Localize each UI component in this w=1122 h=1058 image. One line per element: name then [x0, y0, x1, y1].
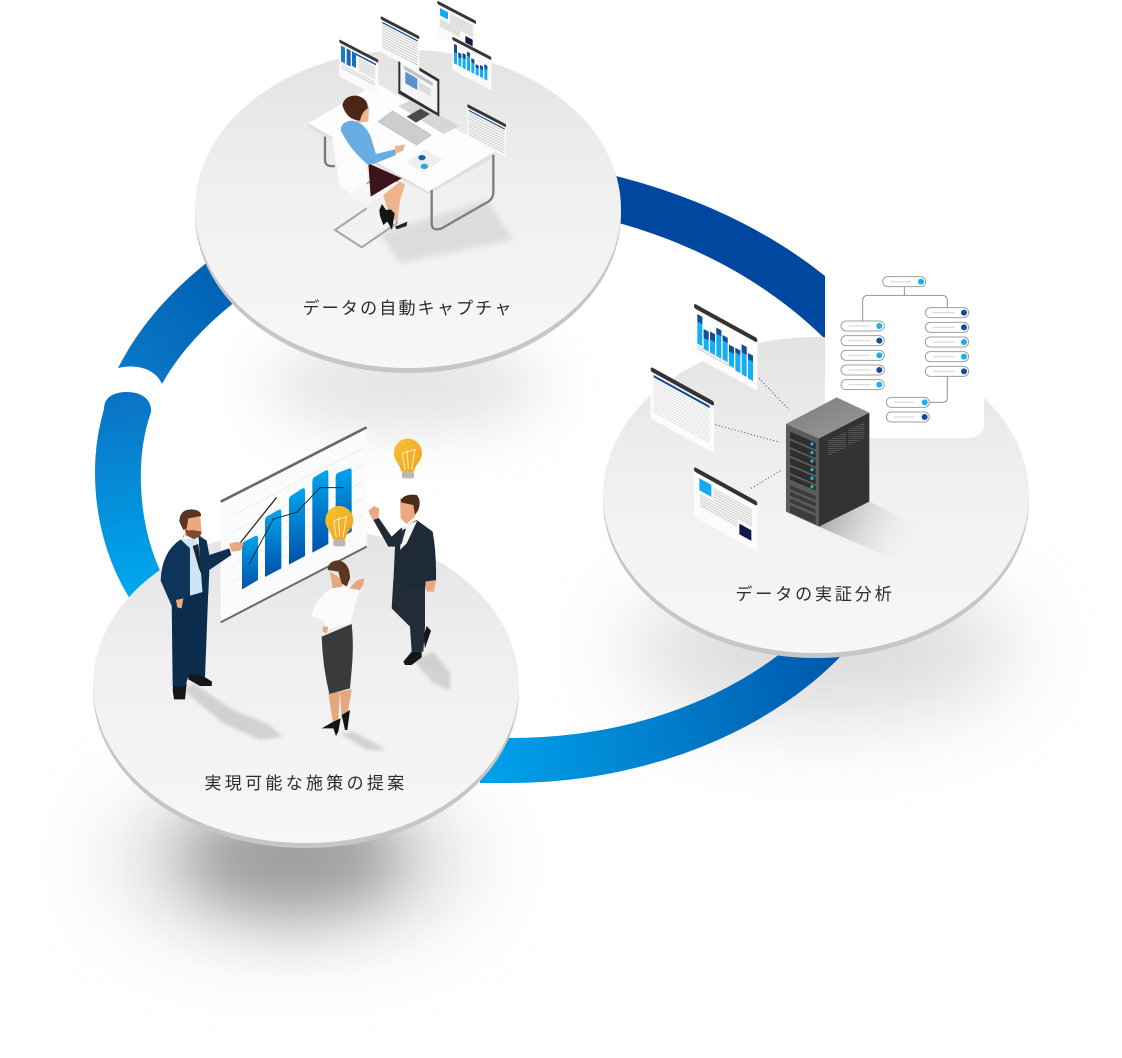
- shadow: top disk: [265, 340, 545, 430]
- server floor shadow: [819, 502, 927, 558]
- ring: left arc: [95, 392, 162, 602]
- label: feasible proposals: 実現可能な施策の提案: [204, 774, 408, 793]
- pill text bars: [848, 281, 955, 418]
- scene: presentation: [161, 427, 450, 750]
- ring: bottom arc: [480, 650, 842, 783]
- ring: upper right arc: [612, 175, 825, 339]
- scene: desk worker: [308, 1, 513, 263]
- pill dots: [876, 279, 967, 420]
- trend line and pointer: [239, 488, 343, 564]
- pills: flow nodes: [841, 277, 969, 422]
- window: text list: [651, 367, 714, 453]
- floor shadows: [183, 652, 450, 750]
- window: text list 2: [467, 104, 506, 157]
- person: [341, 96, 407, 230]
- panel: left disk: [93, 427, 519, 848]
- dotted links: [715, 378, 789, 488]
- connectors: [863, 287, 947, 402]
- chair: [332, 135, 400, 247]
- chart bars: [242, 468, 352, 589]
- mouse pad and cups: [406, 149, 443, 172]
- window: bar chart: [694, 303, 757, 391]
- window: image and text: [694, 467, 757, 551]
- window: image and text: [437, 1, 476, 57]
- lightbulb: lower: [325, 506, 353, 546]
- window: bars: [339, 39, 378, 97]
- label: empirical analysis: データの実証分析: [735, 584, 895, 604]
- desk: [308, 83, 495, 229]
- lightbulb: upper: [394, 439, 422, 478]
- window: bar chart: [452, 37, 491, 90]
- monitor: [398, 55, 459, 134]
- shadow: right disk: [627, 580, 1017, 720]
- woman: [312, 560, 364, 736]
- keyboard: [378, 111, 431, 145]
- window: text list 1: [381, 16, 419, 72]
- shadow: left disk wide: [107, 775, 477, 945]
- shadow: left disk core: [182, 803, 402, 913]
- panel: right disk: [603, 230, 1029, 658]
- label: automatic capture: データの自動キャプチャ: [302, 298, 514, 318]
- server rack: [786, 397, 869, 527]
- scene: server: [651, 303, 927, 558]
- panel: flow chart card: [825, 230, 984, 438]
- man presenting: [161, 509, 243, 699]
- chart board: [221, 427, 367, 622]
- man right: [368, 495, 436, 665]
- ring: upper left arc: [118, 260, 240, 384]
- panel: top disk: [195, 1, 621, 373]
